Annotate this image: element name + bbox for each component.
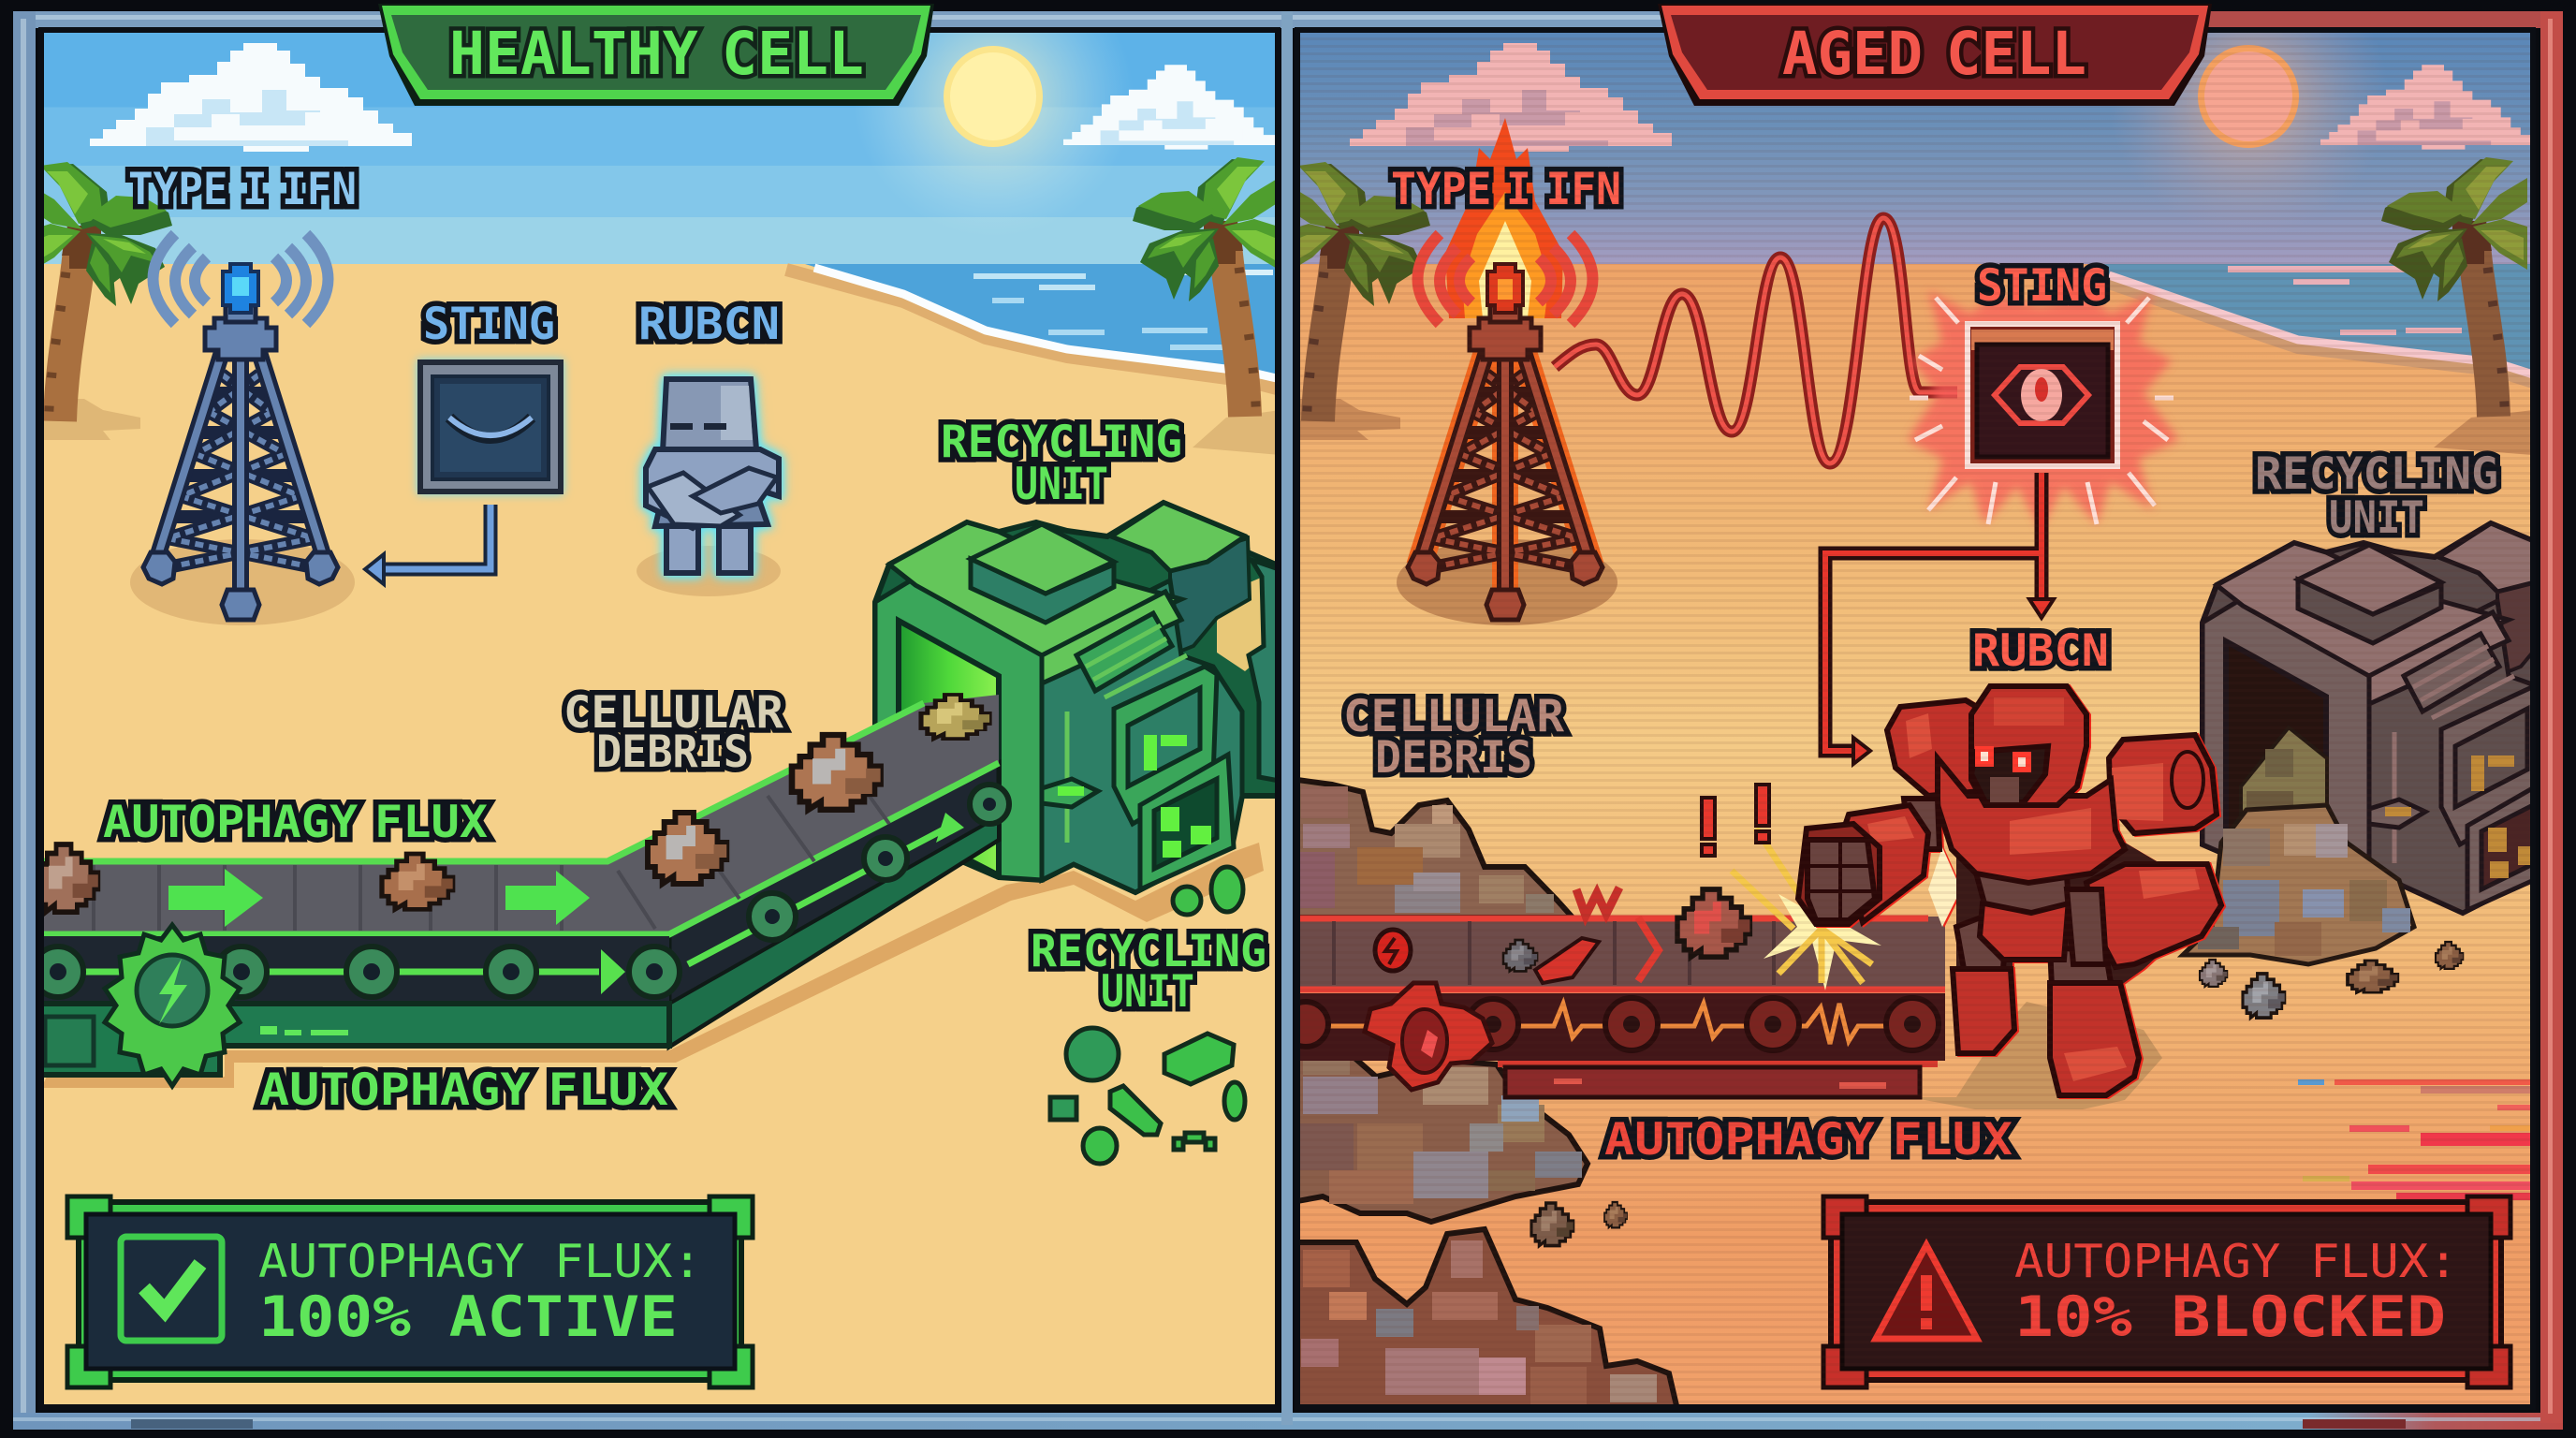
label: RECYCLING UNIT lower: RECYCLING — [1031, 926, 1266, 977]
status label: AUTOPHAGY FLUX: — [2014, 1235, 2458, 1288]
label: STING: STING — [1977, 260, 2107, 312]
label: CELLULAR DEBRIS: CELLULAR — [564, 687, 784, 739]
debris pile upper left — [1297, 780, 1573, 917]
label: RECYCLING UNIT top: UNIT — [1015, 459, 1108, 510]
cloud left — [90, 43, 431, 152]
palm tree left — [44, 162, 172, 421]
debris rock 1 — [34, 844, 98, 912]
failing ECG line — [1297, 1004, 1919, 1044]
belt lower band — [1297, 993, 1945, 1061]
recycled output pieces — [1050, 1028, 1245, 1164]
arrow: STING to tower — [365, 505, 490, 584]
debris rock 4 — [792, 735, 881, 810]
palm shadow left — [1297, 399, 1400, 440]
banner title: AGED CELL — [1782, 20, 2086, 88]
palm tree right — [2381, 157, 2527, 417]
label: CELLULAR DEBRIS — [564, 687, 784, 778]
tower shadow — [1397, 539, 1617, 625]
palm tree right — [1133, 157, 1279, 417]
label: AUTOPHAGY FLUX bottom: AUTOPHAGY FLUX — [259, 1064, 668, 1116]
arrow: STING to RUBCN — [1825, 473, 2054, 764]
banner: healthy cell — [378, 4, 934, 106]
icon: beacon flame — [1445, 118, 1563, 318]
sky — [1297, 30, 2533, 264]
icon: STING alarm burst — [1908, 290, 2179, 529]
scattered rocks right — [2200, 942, 2463, 1018]
label: RECYCLING UNIT — [2255, 448, 2498, 544]
label: RECYCLING UNIT top: RECYCLING — [941, 417, 1182, 468]
rubble blocking machine door — [2183, 727, 2414, 964]
conveyor belt: blocked — [1283, 917, 1945, 1097]
cloud right — [2320, 65, 2545, 150]
glitch lines — [2298, 1079, 2533, 1200]
icon: warning triangle — [1876, 1245, 1977, 1339]
debris rock 3 — [648, 813, 726, 884]
sea and shoreline — [786, 264, 1281, 389]
crushed debris on belt — [1503, 888, 1659, 983]
icon: STING box — [420, 362, 561, 492]
icon: lightning gear — [105, 925, 240, 1086]
debris pile bottom left — [1297, 1229, 1678, 1414]
recycling machine: inactive — [2203, 523, 2576, 913]
banner title: HEALTHY CELL — [449, 20, 864, 88]
debris rock entering machine — [921, 695, 989, 739]
icon: red beacon — [1487, 264, 1523, 313]
label: CELLULAR DEBRIS: DEBRIS — [596, 726, 749, 778]
debris rock 2 — [382, 854, 453, 909]
scattered rocks left — [1531, 1202, 1627, 1246]
palm tree left — [1284, 162, 1430, 421]
belt top surface — [1297, 917, 1945, 990]
icon: robot eyes — [1975, 746, 2031, 772]
icon: broken gear — [1365, 983, 1492, 1090]
label: AUTOPHAGY FLUX top: AUTOPHAGY FLUX — [103, 797, 488, 848]
label: RECYCLING UNIT: RECYCLING — [2255, 448, 2498, 500]
panel: healthy cell scene — [26, 0, 1288, 1407]
label: TYPE I IFN: TYPE I IFN — [128, 164, 357, 215]
status label: AUTOPHAGY FLUX: — [258, 1235, 702, 1288]
belt flow line — [41, 829, 945, 972]
icon: overheating tower — [1408, 305, 1603, 620]
crushed debris block — [1677, 889, 1749, 957]
arrow: belt left — [168, 869, 263, 927]
cloud right — [1063, 65, 1288, 150]
status panel: autophagy active — [67, 1196, 753, 1387]
wheels — [1283, 998, 1939, 1050]
icon: idle RUBCN robot — [646, 379, 779, 573]
label: RECYCLING UNIT lower — [1031, 926, 1266, 1018]
label: RECYCLING UNIT: UNIT — [2329, 492, 2424, 544]
machine ground shadow — [41, 843, 1264, 1088]
conveyor belt: healthy — [33, 695, 1009, 1047]
recycled output top pieces — [1173, 867, 1243, 915]
cloud left — [1350, 43, 1690, 152]
panel: aged cell scene — [1283, 0, 2576, 1414]
conveyor console — [44, 1015, 223, 1078]
label: TYPE I IFN: TYPE I IFN — [1391, 164, 1621, 215]
arrow: belt right — [505, 871, 590, 925]
sun — [867, 33, 1120, 217]
robot ground shadow — [1910, 1002, 2162, 1109]
icon: STING eye box — [1968, 324, 2117, 466]
label: CELLULAR DEBRIS: DEBRIS — [1375, 732, 1532, 784]
status value: 100% ACTIVE — [258, 1284, 678, 1350]
wheels — [33, 785, 1009, 997]
chart: inflammatory signal wave — [1555, 218, 1957, 463]
debris pile middle left — [1297, 1027, 1588, 1222]
tower shadow — [130, 539, 355, 625]
label: STING: STING — [423, 299, 555, 350]
banner: aged cell — [1658, 4, 2212, 106]
sky — [41, 30, 1278, 264]
icon: warning mark on belt — [1375, 930, 1411, 971]
label: RECYCLING UNIT top — [941, 417, 1182, 510]
icon: signal waves — [154, 234, 328, 324]
icon: check box — [121, 1237, 222, 1341]
sun — [2108, 0, 2389, 237]
label: CELLULAR DEBRIS: CELLULAR — [1343, 691, 1565, 742]
icon: attacking RUBCN robot — [1798, 686, 2221, 1095]
icon: alert marks — [1702, 785, 1769, 856]
belt lower band — [41, 936, 669, 1004]
beach sand — [41, 264, 1278, 1407]
impact burst — [1732, 829, 1881, 990]
palm shadow left — [41, 399, 140, 440]
sea and shoreline — [2097, 264, 2533, 382]
beach sand — [1297, 264, 2533, 1407]
label: AUTOPHAGY FLUX: AUTOPHAGY FLUX — [1604, 1114, 2012, 1166]
CRT scanlines — [1297, 30, 2533, 1407]
label: RUBCN: RUBCN — [638, 299, 780, 350]
label: CELLULAR DEBRIS — [1343, 691, 1565, 784]
icon: blue beacon — [223, 264, 258, 313]
status panel: autophagy blocked — [1823, 1196, 2510, 1387]
status value: 10% BLOCKED — [2014, 1284, 2446, 1350]
icon: signal tower — [143, 305, 338, 620]
icon: signal waves — [1417, 234, 1593, 324]
label: RUBCN: RUBCN — [1972, 625, 2109, 677]
palm shadow right — [2434, 410, 2533, 455]
belt lower diagonal — [669, 763, 999, 1047]
recycling machine: active — [875, 503, 1284, 892]
belt top surface — [41, 695, 999, 934]
label: RECYCLING UNIT lower: UNIT — [1101, 966, 1194, 1018]
robot shadow — [637, 546, 781, 596]
palm shadow right — [1193, 410, 1281, 455]
